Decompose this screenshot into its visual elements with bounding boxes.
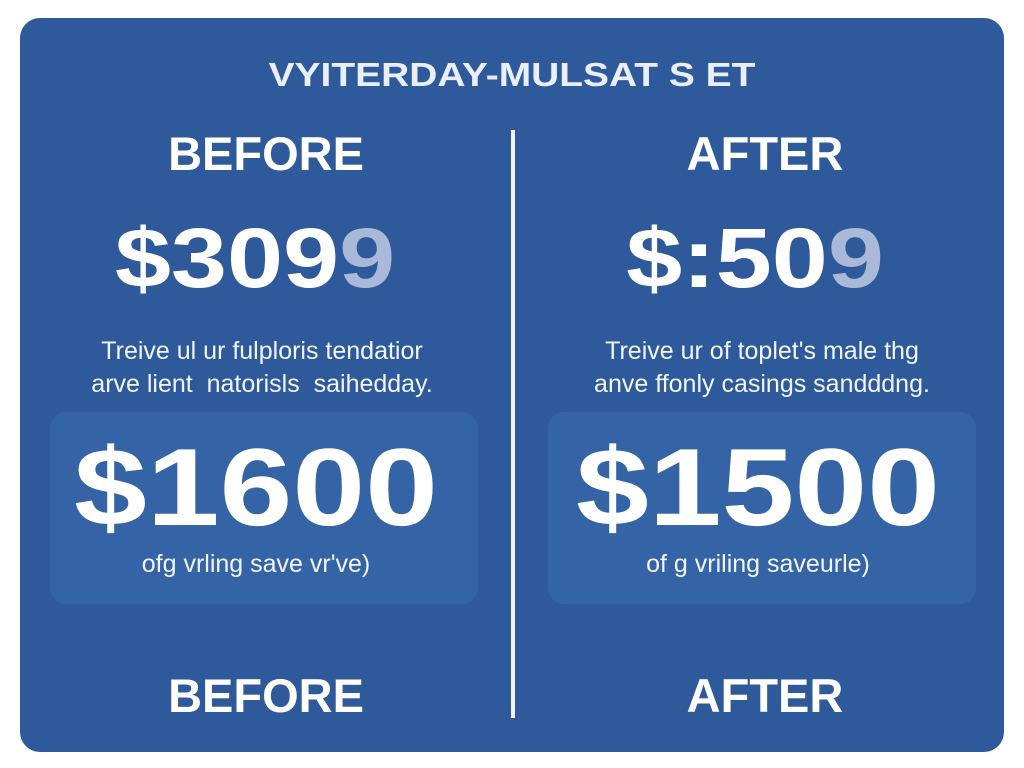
big number: $1500 — [576, 426, 940, 549]
big number: $1600 — [74, 426, 438, 549]
title: VYITERDAY-MULSAT S ET — [269, 56, 755, 93]
box: before savings — [50, 412, 478, 604]
text: before description — [91, 337, 433, 398]
text: after description: Treive ur of toplet's male thg — [605, 337, 919, 365]
footer: after: AFTER — [687, 669, 843, 722]
box: after savings — [548, 412, 976, 604]
text: before description: Treive ul ur fulploris tendatior — [101, 337, 423, 365]
footer: before: BEFORE — [168, 669, 364, 722]
text: after description: anve ffonly casings sandddng. — [594, 370, 930, 398]
caption: of g vriling saveurle) — [646, 550, 870, 578]
heading: before: BEFORE — [168, 127, 364, 180]
text: before description: arve lient natorisls saihedday. — [91, 370, 433, 398]
price: before: $3099 — [115, 211, 395, 305]
caption: ofg vrling save vr've) — [142, 550, 370, 578]
text: after description — [594, 337, 930, 398]
divider — [511, 130, 515, 718]
heading: after: AFTER — [687, 127, 843, 180]
price: after: $:509 — [626, 211, 884, 305]
